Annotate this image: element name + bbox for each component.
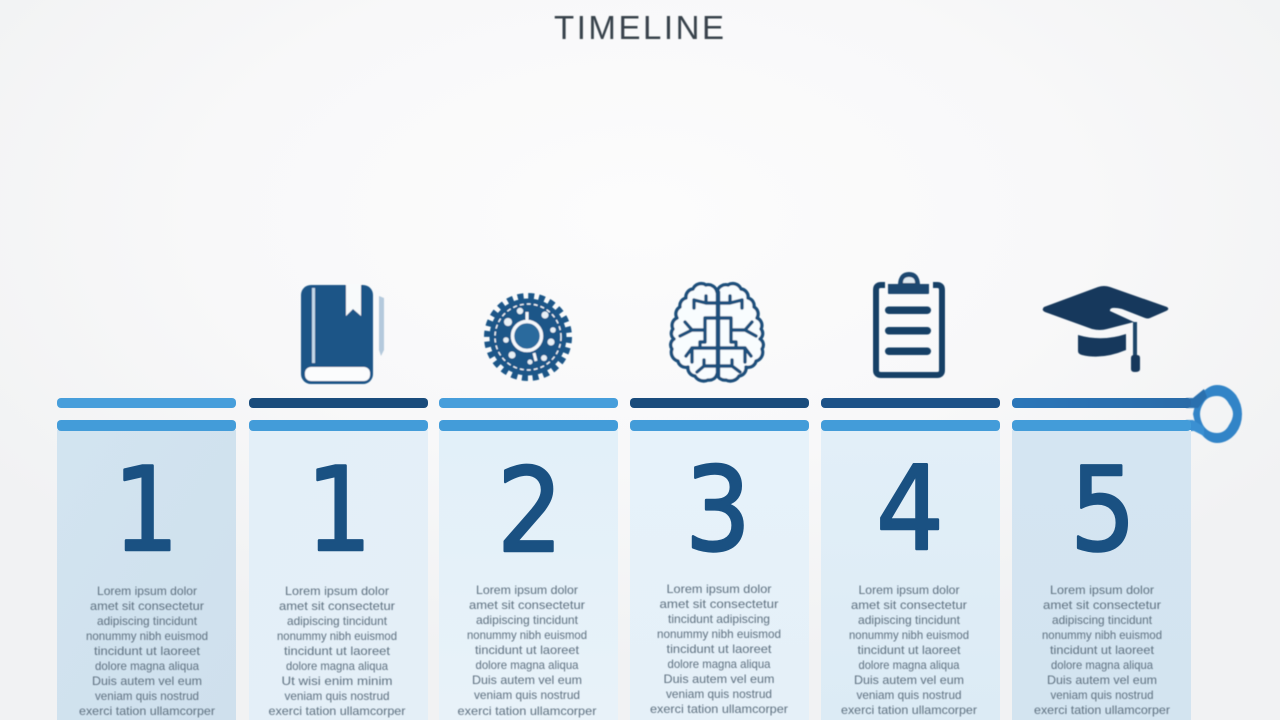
panel 2 — [249, 398, 428, 720]
panel 5 text: Lorem ipsum dolor — [858, 583, 960, 597]
panel 3 top bar — [439, 398, 618, 408]
panel 1 lower bar — [57, 420, 236, 431]
panel 1 text: dolore magna aliqua — [95, 659, 199, 673]
panel 1 text: exerci tation ullamcorper — [79, 704, 215, 718]
panel 6 text: adipiscing tincidunt — [1052, 613, 1153, 627]
panel 2 text: nonummy nibh euismod — [277, 629, 397, 643]
panel 2 text: exerci tation ullamcorper — [268, 704, 406, 718]
panel 6 text: tincidunt ut laoreet — [1050, 643, 1155, 657]
panel 5 lower bar — [821, 420, 1000, 431]
panel 1 text: adipiscing tincidunt — [97, 614, 198, 628]
panel 3 text: amet sit consectetur — [469, 598, 585, 612]
panel 6 top bar — [1012, 398, 1191, 408]
panel 4 text: exerci tation ullamcorper — [650, 702, 788, 716]
panel 6 text: Duis autem vel eum — [1047, 673, 1157, 687]
panel 5 text: amet sit consectetur — [851, 598, 967, 612]
icon: clipboard — [876, 272, 942, 375]
panel 6 text: amet sit consectetur — [1043, 598, 1161, 612]
panel 4 text: nonummy nibh euismod — [657, 627, 781, 641]
panel 6 text: Lorem ipsum dolor — [1050, 583, 1154, 597]
panel 5 number: 4 — [876, 442, 944, 577]
panel 1 text: veniam quis nostrud — [95, 689, 199, 703]
panel 3 text: Duis autem vel eum — [472, 673, 582, 687]
panel 3 text — [458, 583, 596, 718]
panel 5 text: adipiscing tincidunt — [858, 613, 961, 627]
panel 6 text: exerci tation ullamcorper — [1034, 703, 1170, 717]
panel 5 text: Duis autem vel eum — [854, 673, 964, 687]
panel 1 text: amet sit consectetur — [90, 599, 204, 613]
panel 3 lower bar — [439, 420, 618, 431]
panel 2 background — [249, 430, 428, 720]
panel 2 text: Ut wisi enim minim — [282, 674, 392, 688]
panel 5 text: dolore magna aliqua — [858, 658, 960, 672]
panel 1 top bar — [57, 398, 236, 408]
panel 4 text: amet sit consectetur — [660, 597, 778, 611]
panel 2 text: veniam quis nostrud — [284, 689, 390, 703]
panel 6 text: nonummy nibh euismod — [1042, 628, 1162, 642]
panel 4 text: tincidunt ut laoreet — [666, 642, 772, 656]
panel 2 text: tincidunt ut laoreet — [284, 644, 391, 658]
panel 2 text: adipiscing tincidunt — [287, 614, 388, 628]
panel 4 text: Lorem ipsum dolor — [666, 582, 772, 596]
timeline ring end cap — [1186, 385, 1242, 443]
panel 3 background — [439, 430, 618, 720]
panel 4 text: Duis autem vel eum — [664, 672, 774, 686]
panel 2 lower bar — [249, 420, 428, 431]
panel 3 — [439, 398, 618, 720]
panel 2 number: 1 — [306, 443, 372, 578]
panel 2 text: Lorem ipsum dolor — [285, 584, 389, 598]
panel 5 text: tincidunt ut laoreet — [858, 643, 961, 657]
icon: book — [301, 284, 384, 384]
panel 1 text: nonummy nibh euismod — [86, 629, 208, 643]
panel 6 — [1012, 398, 1191, 720]
icon: graduation cap — [1043, 286, 1168, 372]
panel 5 text — [841, 583, 977, 717]
panel 2 text: amet sit consectetur — [279, 599, 395, 613]
panel 3 text: nonummy nibh euismod — [467, 628, 587, 642]
panel 4 text: dolore magna aliqua — [668, 657, 771, 671]
panel 3 text: tincidunt ut laoreet — [475, 643, 580, 657]
panel 4 text: veniam quis nostrud — [666, 687, 772, 701]
panel 1 text: Lorem ipsum dolor — [97, 584, 197, 598]
panel 3 number: 2 — [497, 444, 563, 579]
panel 1 number: 1 — [113, 443, 179, 578]
panel 1 text — [79, 584, 215, 718]
panel 2 text: dolore magna aliqua — [286, 659, 388, 673]
panel 5 background — [821, 430, 1000, 720]
panel 5 text: nonummy nibh euismod — [849, 628, 969, 642]
icon: brain — [671, 284, 763, 381]
panel 2 text — [268, 584, 406, 718]
panel 6 lower bar — [1012, 420, 1191, 431]
panel 3 text: dolore magna aliqua — [476, 658, 579, 672]
panel 6 text — [1034, 583, 1170, 717]
panel 5 text: veniam quis nostrud — [856, 688, 962, 702]
panel 5 top bar — [821, 398, 1000, 408]
panel 4 number: 3 — [685, 443, 751, 578]
panel 3 text: Lorem ipsum dolor — [476, 583, 578, 597]
panel 1 — [57, 398, 236, 720]
panel 4 text — [650, 582, 788, 716]
panel 2 top bar — [249, 398, 428, 408]
panel 1 background — [57, 430, 236, 720]
panel 1 text: Duis autem vel eum — [92, 674, 202, 688]
panel 3 text: veniam quis nostrud — [474, 688, 580, 702]
panel 3 text: adipiscing tincidunt — [476, 613, 579, 627]
panel 6 number: 5 — [1070, 443, 1136, 578]
panel 1 text: tincidunt ut laoreet — [94, 644, 201, 658]
panel 4 top bar — [630, 398, 809, 408]
panel 6 text: dolore magna aliqua — [1051, 658, 1153, 672]
panel 4 text: tincidunt adipiscing — [668, 612, 770, 626]
panel 5 — [821, 398, 1000, 720]
panel 6 background — [1012, 430, 1191, 720]
panel 6 text: veniam quis nostrud — [1050, 688, 1154, 702]
panel 4 lower bar — [630, 420, 809, 431]
icon: gear — [487, 296, 569, 378]
panel 3 text: exerci tation ullamcorper — [458, 704, 596, 718]
panel 5 text: exerci tation ullamcorper — [841, 703, 977, 717]
panel 4 background — [630, 430, 809, 720]
title: TIMELINE — [554, 9, 724, 46]
panel 4 — [630, 398, 809, 720]
